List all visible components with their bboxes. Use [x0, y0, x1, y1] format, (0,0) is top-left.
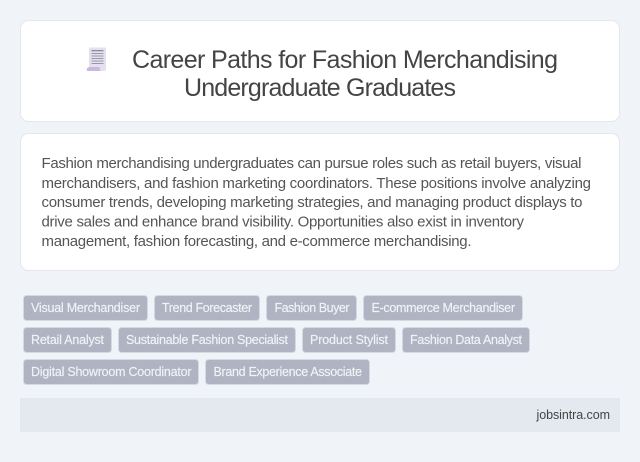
tag: Sustainable Fashion Specialist: Sustainable Fashion Specialist — [126, 333, 289, 347]
icon: paper scroll — [87, 48, 106, 71]
tag: Sustainable Fashion Specialist — [118, 328, 296, 352]
tag: E-commerce Merchandiser — [364, 296, 522, 320]
title: Undergraduate Graduates — [184, 74, 456, 102]
footer text: jobsintra.com — [536, 408, 610, 422]
tag: Product Stylist: Product Stylist — [310, 333, 389, 347]
tag: Fashion Data Analyst: Fashion Data Analyst — [410, 333, 523, 347]
description panel — [20, 134, 620, 270]
description text — [42, 155, 591, 250]
tag: Retail Analyst: Retail Analyst — [31, 333, 105, 347]
description text: merchandisers, and fashion marketing coordinators. These positions involve analyzing — [42, 175, 591, 192]
tag: Trend Forecaster: Trend Forecaster — [162, 301, 252, 315]
tag: E-commerce Merchandiser: E-commerce Merchandiser — [372, 301, 515, 315]
description text: drive sales and enhance brand visibility. Opportunities also exist in inventory — [42, 214, 524, 230]
header panel — [20, 20, 620, 122]
tag: Retail Analyst — [24, 328, 112, 352]
title — [132, 46, 558, 102]
tag: Trend Forecaster — [154, 296, 260, 320]
footer — [20, 398, 620, 432]
tag: Product Stylist — [302, 328, 396, 352]
tag: Digital Showroom Coordinator — [24, 360, 198, 384]
tag: Fashion Buyer — [266, 296, 356, 320]
tag: Brand Experience Associate — [206, 360, 370, 384]
tags — [24, 296, 530, 384]
tag: Fashion Data Analyst — [402, 328, 530, 352]
tag: Fashion Buyer: Fashion Buyer — [274, 301, 350, 315]
tag: Digital Showroom Coordinator: Digital Showroom Coordinator — [31, 365, 192, 379]
tag: Visual Merchandiser: Visual Merchandiser — [31, 301, 140, 315]
description text: management, fashion forecasting, and e-commerce merchandising. — [42, 233, 472, 250]
description text: consumer trends, developing marketing strategies, and managing product displays to — [42, 194, 582, 211]
title: Career Paths for Fashion Merchandising — [132, 46, 558, 74]
tag: Visual Merchandiser — [24, 296, 148, 320]
tag: Brand Experience Associate: Brand Experience Associate — [214, 365, 362, 379]
description text: Fashion merchandising undergraduates can pursue roles such as retail buyers, visual — [42, 155, 582, 172]
